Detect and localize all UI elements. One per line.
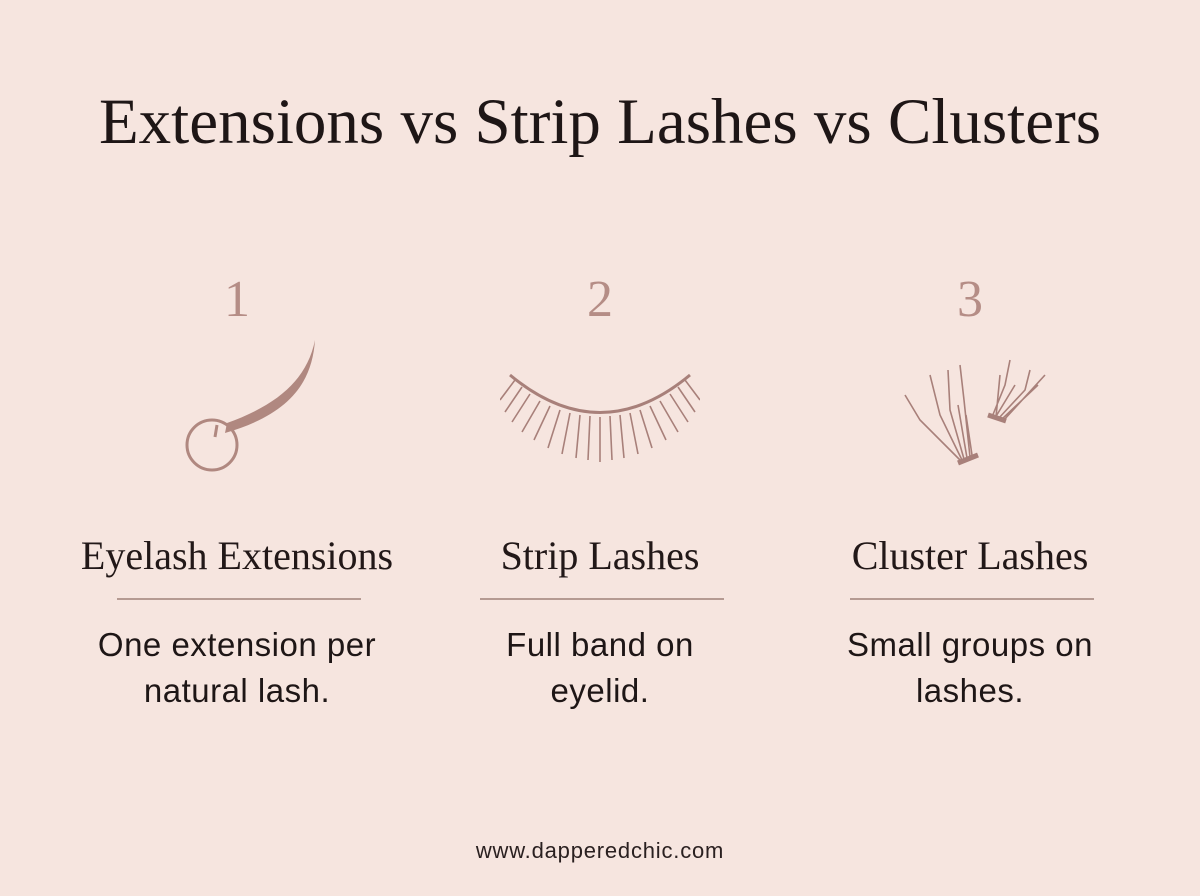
- heading: Eyelash Extensions: [81, 533, 393, 578]
- description: Full band on: [506, 626, 694, 663]
- description: natural lash.: [144, 672, 330, 709]
- description: eyelid.: [551, 672, 649, 709]
- description: [506, 626, 694, 709]
- description: [847, 626, 1093, 709]
- number 2: 2: [587, 271, 613, 328]
- number 3: 3: [957, 271, 983, 328]
- description: Small groups on: [847, 626, 1093, 663]
- panel: strip lashes: [480, 271, 724, 709]
- footer url: www.dapperedchic.com: [476, 838, 724, 863]
- description: lashes.: [916, 672, 1024, 709]
- number 1: 1: [224, 271, 250, 328]
- heading: Strip Lashes: [501, 533, 699, 578]
- icon: clusters: [904, 360, 1046, 466]
- description: One extension per: [98, 626, 376, 663]
- title: Extensions vs Strip Lashes vs Clusters: [99, 86, 1101, 158]
- icon: strip lash: [500, 374, 700, 462]
- panel: eyelash extensions: [81, 271, 393, 709]
- icon: single extension: [186, 340, 315, 472]
- panel: cluster lashes: [847, 271, 1094, 709]
- description: [98, 626, 376, 709]
- heading: Cluster Lashes: [852, 533, 1088, 578]
